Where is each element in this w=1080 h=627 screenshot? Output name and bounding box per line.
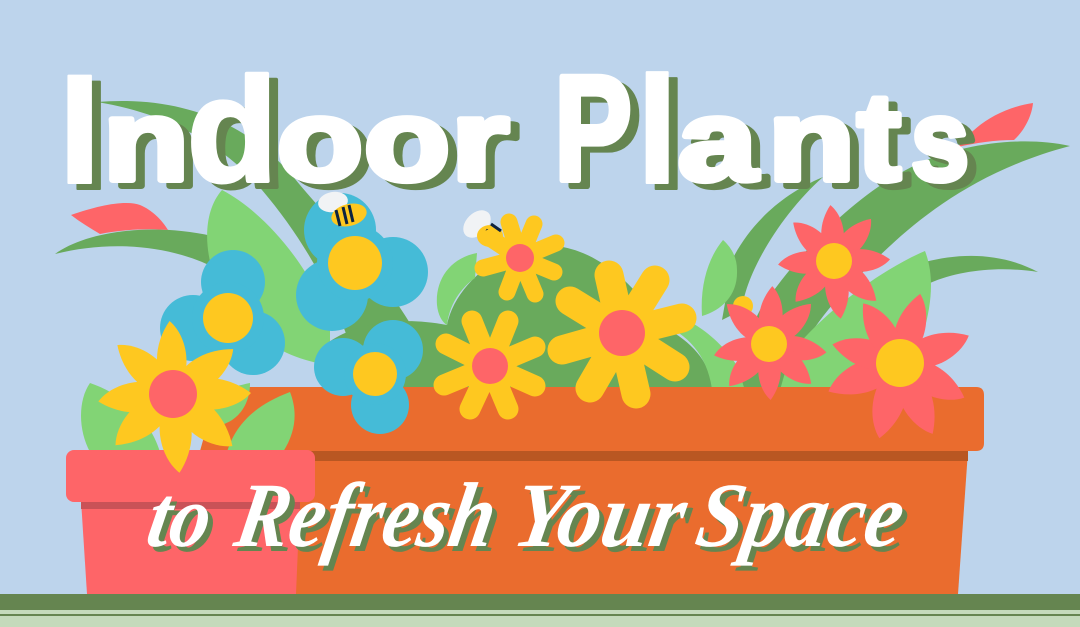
stripes xyxy=(486,224,503,241)
wing xyxy=(458,205,496,243)
leaf: large light green xyxy=(207,190,330,365)
subtitle word: to: to xyxy=(141,469,220,566)
title word: Indoor: r xyxy=(451,77,509,205)
title word: Plants: t xyxy=(857,68,901,207)
title word: Indoor: I xyxy=(58,43,101,217)
title word: Plants: l xyxy=(636,45,679,216)
bee: on top daisy xyxy=(458,205,503,247)
pot rim xyxy=(66,450,315,502)
title word: Plants: n xyxy=(768,77,855,205)
leaf: light green arc right of bush xyxy=(655,310,749,390)
leaf: right small upright xyxy=(702,240,737,316)
flower: blue lower xyxy=(314,320,423,434)
flower: yellow pointed on red pot xyxy=(97,321,251,474)
title word: Indoor: o xyxy=(277,77,363,205)
box body xyxy=(210,451,968,594)
box rim xyxy=(200,387,984,451)
title word: Indoor: o xyxy=(364,77,450,205)
leaf: pot right xyxy=(227,392,295,452)
subtitle word: Space: Space xyxy=(689,465,912,567)
wing xyxy=(316,190,350,214)
subtitle: to Refresh Your Space xyxy=(141,465,912,567)
flower: coral mid xyxy=(712,285,828,400)
stem: upper left arc xyxy=(97,101,425,350)
title word: Plants: a xyxy=(678,77,758,205)
mound: dark green bush xyxy=(325,246,713,390)
leaf: pot left xyxy=(81,383,160,452)
stem: long right arc xyxy=(741,141,1070,390)
orange window box xyxy=(200,387,984,594)
ground stripes xyxy=(0,594,1080,627)
body xyxy=(329,200,369,230)
title: Indoor Plants xyxy=(58,43,969,217)
title word: Plants: P xyxy=(554,44,632,212)
flower: yellow daisy top xyxy=(483,222,556,294)
title word: Plants: s xyxy=(911,77,969,205)
bud: left coral xyxy=(71,203,168,234)
body xyxy=(477,225,503,247)
subtitle word: Your: Your xyxy=(506,465,695,567)
flower: blue top xyxy=(296,193,428,331)
leaves of the small red pot xyxy=(81,383,295,452)
title word: Indoor: d xyxy=(187,48,277,213)
title word: Indoor: n xyxy=(103,77,189,205)
stripes xyxy=(336,205,353,226)
stems and foliage behind flowers xyxy=(55,101,1070,390)
subtitle word: Refresh: Refresh xyxy=(227,465,504,567)
stem: left grass blade xyxy=(55,230,215,268)
flower: yellow daisy middle xyxy=(444,321,535,409)
flower: yellow daisy large xyxy=(562,275,682,394)
bee: on blue flower xyxy=(316,190,369,230)
bud: right coral xyxy=(958,103,1033,147)
leaf: small left of bush xyxy=(437,253,477,325)
bee: hidden behind coral flower xyxy=(732,296,753,325)
small red pot xyxy=(66,450,315,594)
flower: blue left xyxy=(160,250,285,375)
flower: coral top xyxy=(778,205,890,320)
stem: right thin arc xyxy=(722,177,823,320)
pot body xyxy=(81,500,300,594)
stem: right grass blade xyxy=(925,256,1038,283)
box rim shadow xyxy=(210,451,968,461)
leaf: pot middle xyxy=(205,383,250,426)
leaf: large light green right xyxy=(780,251,931,390)
pot rim shadow xyxy=(81,502,300,509)
flower: coral large xyxy=(823,290,974,442)
